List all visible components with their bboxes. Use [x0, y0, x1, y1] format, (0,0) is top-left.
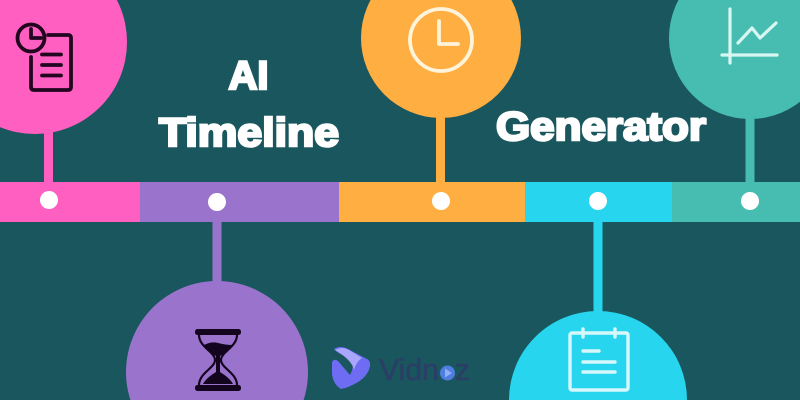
milestone 5: teal [669, 0, 800, 210]
milestone 2: purple [126, 193, 308, 400]
icon: clock [410, 9, 472, 71]
icon: line chart [722, 9, 777, 63]
milestone 1: pink [0, 0, 127, 209]
icon: clock and document [18, 24, 71, 90]
wordmark end: z [455, 352, 470, 387]
icon: hourglass [195, 329, 241, 391]
timeline bar [0, 182, 800, 222]
logo: Vidnoz [332, 347, 470, 389]
milestone 4: cyan [509, 192, 687, 400]
milestone 3: orange [361, 0, 521, 210]
icon: Vidnoz mark [332, 347, 370, 389]
icon: play dot [440, 366, 455, 380]
title: Timeline: Timeline [159, 111, 339, 155]
icon: notepad [570, 329, 628, 390]
title: Generator: Generator [496, 105, 706, 149]
wordmark: Vidn [379, 352, 439, 387]
title: AI: AI [228, 54, 268, 98]
